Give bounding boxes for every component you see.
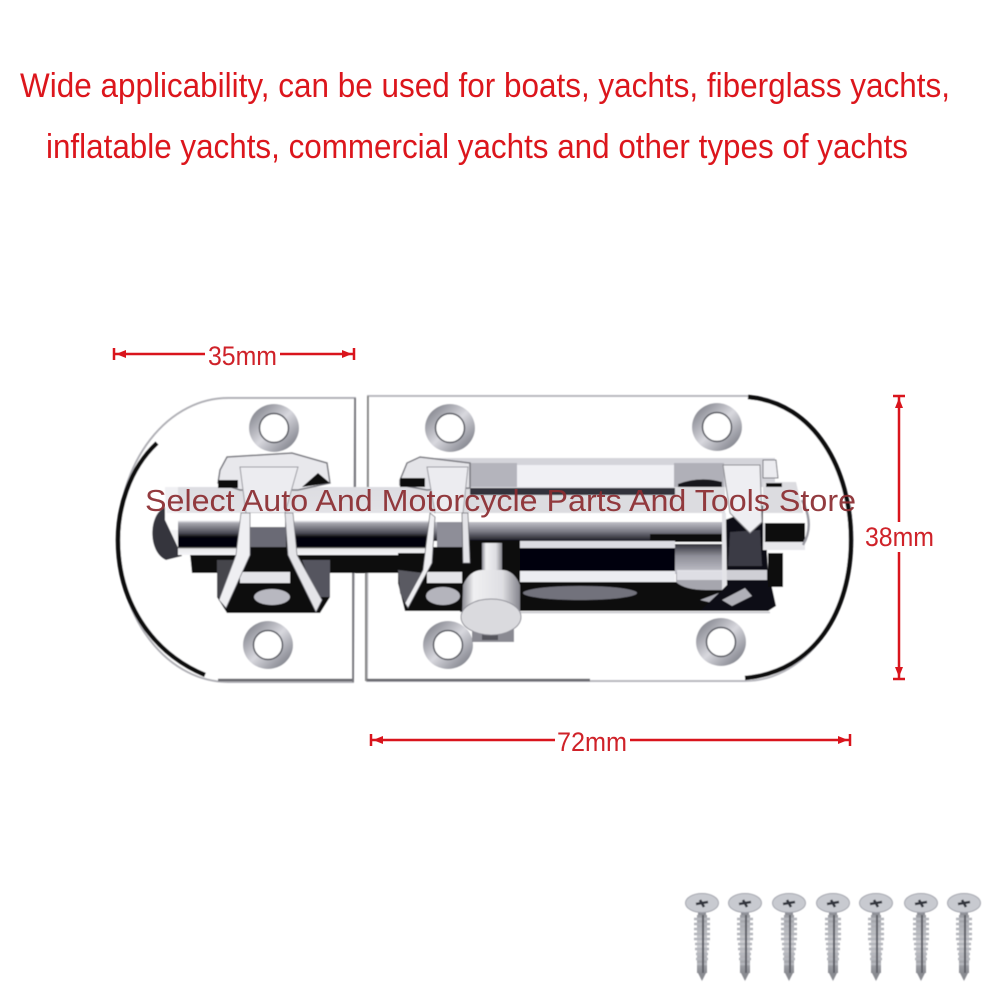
- heading: applicability text: inflatable yachts, commercial yachts and other types of yachts: [46, 128, 908, 166]
- screw holes: [243, 403, 746, 669]
- right bracket: [677, 460, 809, 611]
- right track and slot: [420, 458, 775, 612]
- watermark: Select Auto And Motorcycle Parts And Tools Store: [145, 483, 856, 518]
- dimension: 72mm: 72mm: [557, 727, 627, 757]
- dimension: 38mm: 38mm: [865, 522, 934, 552]
- left plate: [118, 398, 355, 682]
- latch product illustration: [118, 396, 852, 682]
- screws: [686, 894, 980, 981]
- left bracket: [217, 453, 330, 613]
- sliding knob: [461, 543, 521, 642]
- heading: applicability text: Wide applicability, can be used for boats, yachts, fiberglass yachts,: [20, 67, 950, 105]
- heading: applicability text: [20, 67, 950, 166]
- sliding bolt bar: [152, 487, 430, 560]
- center bracket: [398, 457, 470, 611]
- dimension: 35mm: [114, 341, 354, 371]
- dimension: 38mm: [865, 396, 934, 679]
- under-bar shadow: [190, 553, 398, 573]
- dimension: 72mm: [371, 727, 850, 757]
- right plate: [366, 396, 852, 681]
- dimension: 35mm: 35mm: [208, 341, 277, 371]
